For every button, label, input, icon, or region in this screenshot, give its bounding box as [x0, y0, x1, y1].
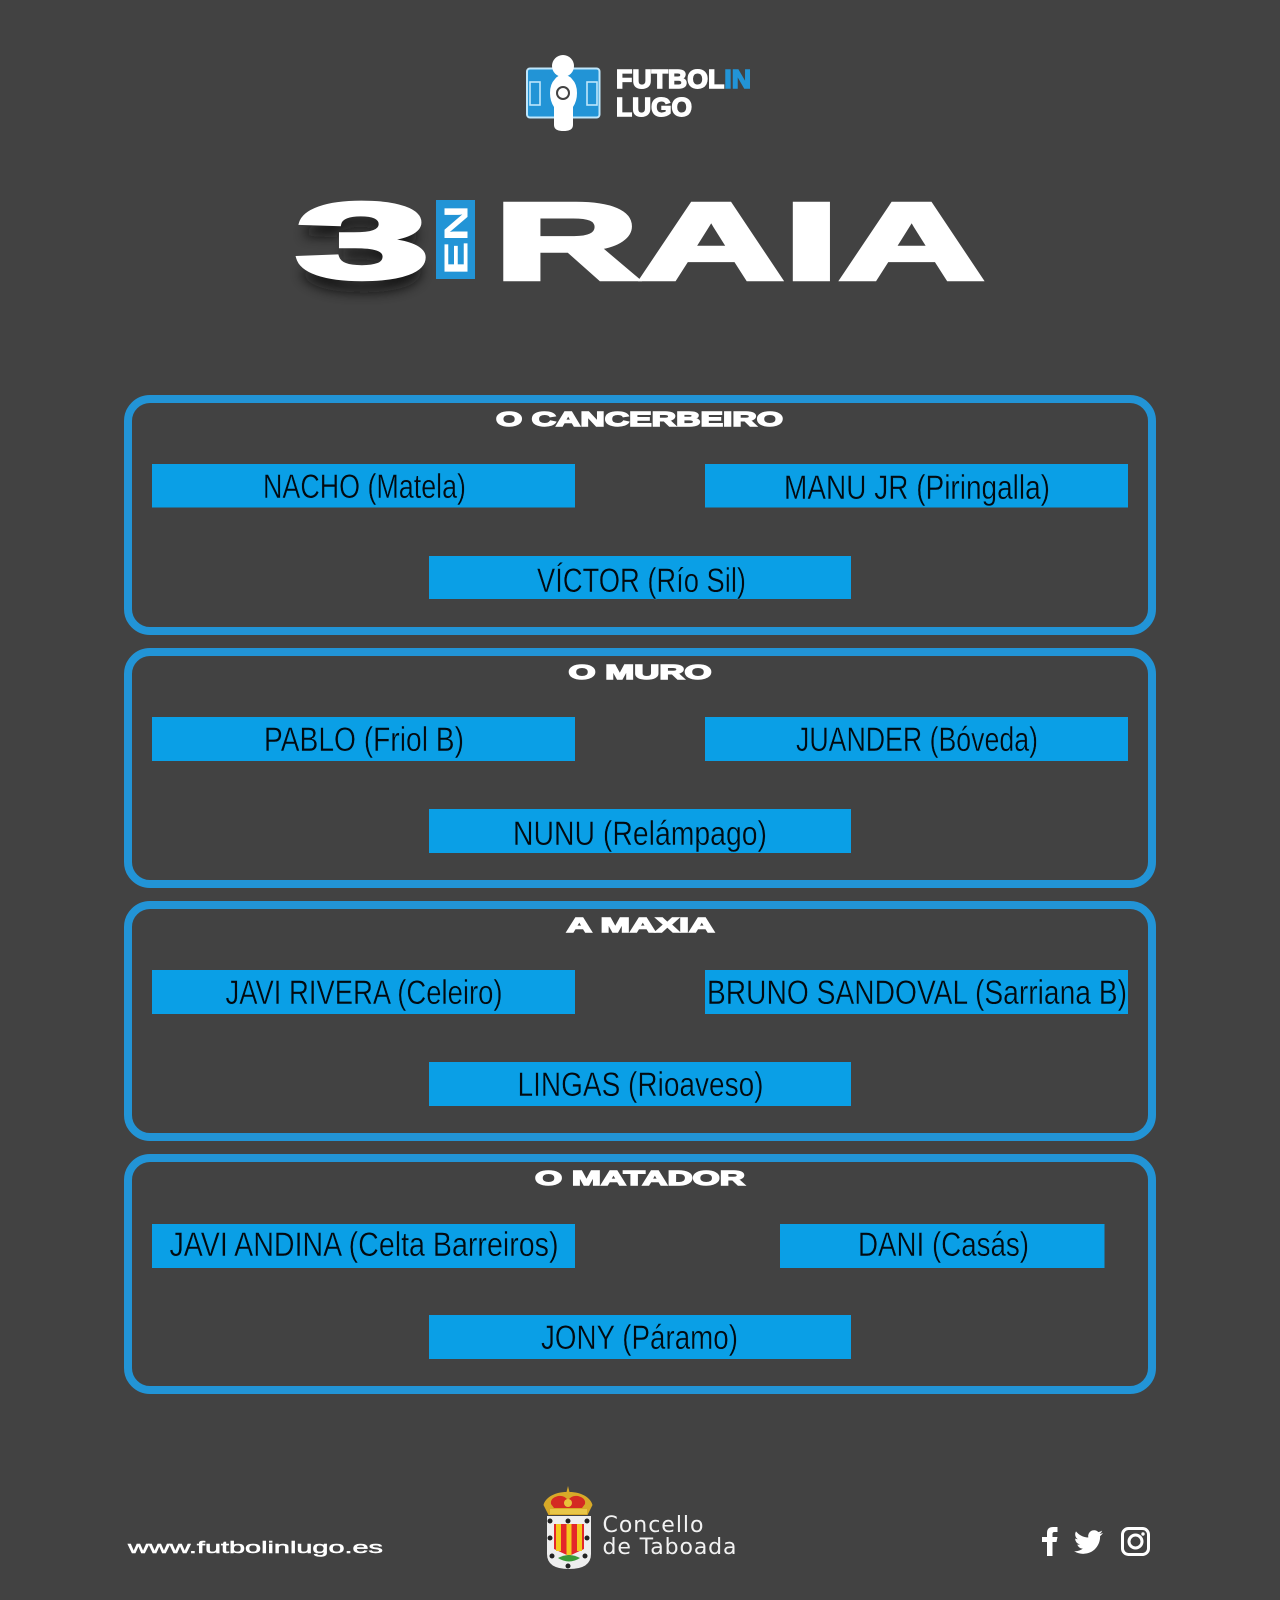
title: 3 en Raia — [295, 180, 984, 314]
heading: A Maxia: A MAXIA — [566, 915, 714, 937]
panel: O Cancerbeiro — [128, 399, 1152, 631]
icon: instagram — [1122, 1528, 1148, 1554]
logo: Concello de Taboada — [544, 1486, 736, 1569]
social icons — [1042, 1527, 1148, 1556]
nominee: Lingas: LINGAS (Rioaveso) — [518, 1066, 764, 1104]
nominee: Jony: JONY (Páramo) — [541, 1319, 738, 1357]
nominee: Víctor — [429, 556, 851, 600]
icon: foosball player on pitch — [527, 55, 600, 131]
nominee: Pablo: PABLO (Friol B) — [264, 721, 464, 759]
nominee: Javi Rivera: JAVI RIVERA (Celeiro) — [226, 974, 502, 1012]
title numeral 3 with shadow: 3 — [295, 193, 430, 314]
panel: O Matador — [128, 1158, 1152, 1390]
nominee: Manu JR — [705, 464, 1128, 508]
icon: coat of arms — [544, 1486, 592, 1569]
nominee: Javi Andina: JAVI ANDINA (Celta Barreiros) — [170, 1226, 558, 1264]
icon: facebook — [1042, 1527, 1058, 1556]
nominee: Nacho — [152, 464, 575, 508]
logo wordmark — [616, 64, 751, 122]
logo: Futbolin Lugo — [527, 55, 751, 131]
nominee: Dani — [780, 1224, 1104, 1268]
title EN badge: EN — [438, 205, 474, 275]
website url: www.futbolinlugo.es — [126, 1538, 383, 1557]
nominee: Nacho: NACHO (Matela) — [263, 468, 466, 506]
title word RAIA: RAIA — [494, 181, 984, 303]
nominee: Jony — [429, 1315, 851, 1359]
municipality name — [602, 1513, 736, 1560]
nominee: Juander: JUANDER (Bóveda) — [796, 721, 1038, 759]
nominee: Lingas — [429, 1062, 851, 1106]
logo wordmark: LUGO — [616, 92, 692, 122]
panel: A Maxia — [128, 905, 1152, 1137]
nominee: Pablo — [152, 717, 575, 761]
nominee: Manu JR: MANU JR (Piringalla) — [784, 469, 1050, 507]
nominee: Víctor: VÍCTOR (Río Sil) — [537, 562, 746, 600]
nominee: Nunu: NUNU (Relámpago) — [513, 815, 767, 853]
municipality name: de Taboada — [602, 1535, 736, 1560]
nominee: Dani: DANI (Casás) — [858, 1226, 1029, 1264]
logo wordmark: FUTBOLIN — [616, 64, 751, 94]
title numeral 3 with shadow — [295, 180, 430, 314]
municipality name: Concello — [602, 1513, 704, 1538]
nominee: Juander — [705, 717, 1128, 761]
nominee: Bruno Sandoval: BRUNO SANDOVAL (Sarriana B) — [707, 974, 1127, 1012]
panel: O Muro — [128, 652, 1152, 884]
heading: O Muro: O MURO — [568, 662, 712, 684]
heading: O Cancerbeiro: O CANCERBEIRO — [496, 409, 783, 431]
icon: twitter — [1074, 1530, 1103, 1554]
heading: O Matador: O MATADOR — [535, 1168, 746, 1190]
title EN badge — [436, 200, 475, 279]
nominee: Nunu — [429, 809, 851, 853]
title numeral 3 with shadow: 3 — [295, 180, 430, 301]
